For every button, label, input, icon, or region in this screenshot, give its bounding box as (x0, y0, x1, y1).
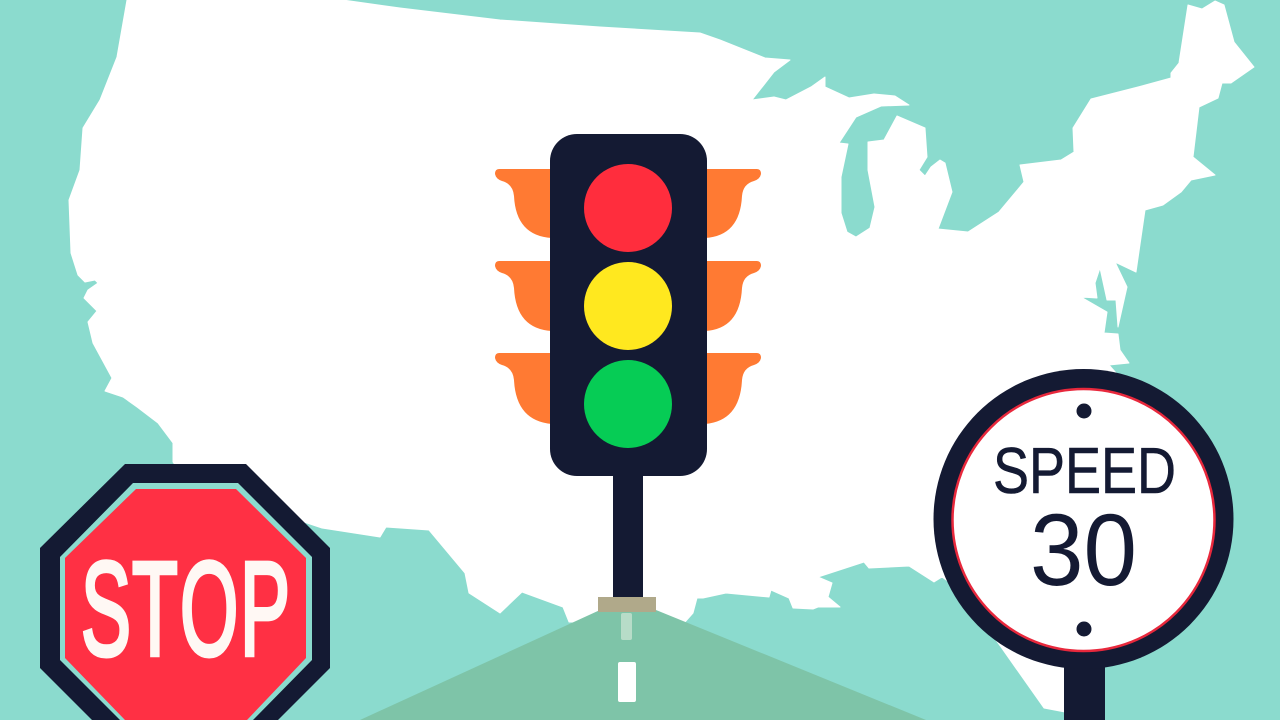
pole (613, 470, 643, 600)
teal ring (60, 483, 312, 720)
orange visors right (705, 169, 761, 424)
red octagon (65, 489, 306, 720)
speed limit sign (934, 369, 1234, 720)
top bolt (1076, 404, 1092, 418)
traffic light (495, 134, 761, 612)
green light (584, 360, 672, 448)
road surface (360, 610, 926, 720)
red and white face (952, 389, 1214, 651)
red light (584, 164, 672, 252)
STOP label: STOP (81, 535, 290, 685)
navy rim (934, 369, 1234, 669)
orange visors left (495, 169, 552, 424)
road (360, 610, 926, 720)
housing (550, 134, 707, 476)
SPEED label: SPEED (993, 434, 1176, 507)
stop sign (40, 464, 330, 720)
speed number: 30 (1030, 493, 1137, 607)
faded road dash (621, 613, 632, 640)
yellow light (584, 262, 672, 350)
bottom bolt (1076, 622, 1092, 636)
white road dash (618, 662, 636, 702)
octagon border (40, 464, 330, 720)
pole base (598, 597, 656, 612)
sign post (1064, 660, 1105, 720)
